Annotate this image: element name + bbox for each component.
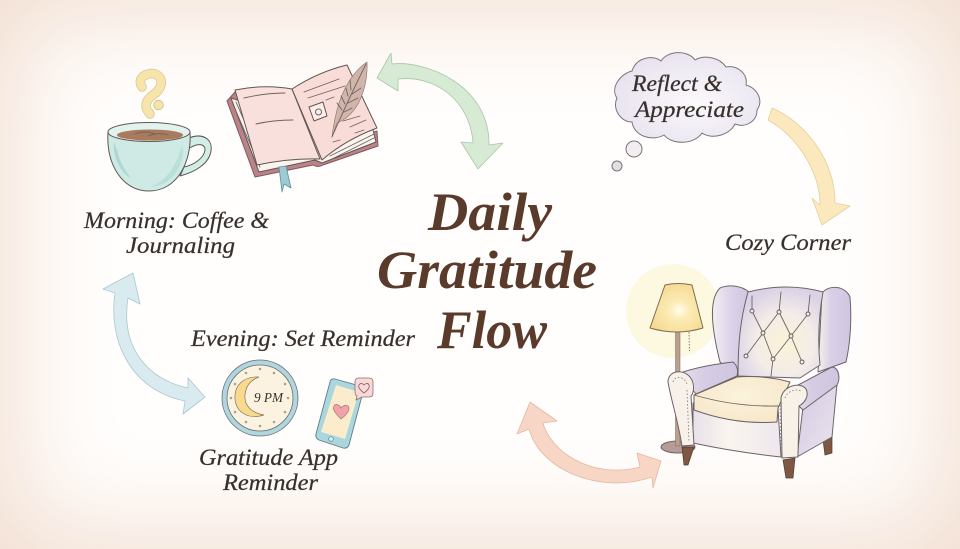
- cloud text: [631, 71, 744, 123]
- seat cushion: [694, 377, 790, 422]
- bookmark ribbon: [279, 166, 291, 192]
- crescent moon: [235, 377, 264, 417]
- label: gratitude app reminder: Reminder: [222, 470, 319, 496]
- left arm front: [668, 372, 694, 446]
- lamp shade: [650, 284, 703, 332]
- cloud text: Appreciate: [633, 97, 744, 123]
- arrow: yellow to cozy corner: [768, 108, 850, 225]
- label: morning: Morning: Coffee &: [83, 208, 270, 234]
- right arm top: [785, 367, 839, 410]
- cloud text: Reflect &: [631, 71, 723, 97]
- lamp glow: [626, 264, 720, 358]
- arrow: peach chair to center: [517, 402, 661, 488]
- icon: phone with heart: [316, 378, 373, 448]
- label: morning: Journaling: [126, 233, 235, 259]
- right wing: [818, 287, 851, 372]
- icon: floor lamp: [626, 264, 720, 453]
- feather: [332, 62, 367, 137]
- tufting: [744, 292, 810, 376]
- left wing: [712, 286, 749, 378]
- steam swirl: [140, 74, 163, 114]
- label: evening: Evening: Set Reminder: [190, 326, 416, 352]
- title: Gratitude: [377, 240, 597, 300]
- label: morning: [83, 208, 270, 259]
- right page: [292, 65, 377, 160]
- heart on screen: [333, 405, 349, 419]
- title: Daily: [427, 182, 553, 242]
- arrow: blue morning to evening: [103, 273, 205, 414]
- clock tick dots: [230, 368, 289, 427]
- clock time text: 9 PM: [254, 390, 284, 405]
- arrow: green journal to center: [377, 53, 503, 169]
- speech bubble with heart: [355, 378, 373, 400]
- cloud: [615, 53, 760, 142]
- title: [377, 182, 597, 360]
- journal cover: [227, 92, 378, 177]
- icon: armchair: [668, 286, 851, 478]
- right arm front: [781, 385, 807, 458]
- left page: [235, 87, 320, 165]
- thought bubbles: [612, 141, 642, 171]
- icon: clock with moon: [222, 360, 298, 436]
- left arm top: [670, 362, 738, 394]
- label: cozy corner: Cozy Corner: [725, 230, 852, 256]
- photo stamp: [309, 102, 327, 121]
- page block: [231, 98, 376, 172]
- icon: coffee cup with steam: [108, 74, 211, 191]
- title: Flow: [436, 300, 548, 360]
- legs: [682, 435, 832, 478]
- label: gratitude app reminder: Gratitude App: [199, 445, 338, 471]
- thought cloud: reflect and appreciate: [612, 53, 760, 171]
- front rail: [693, 403, 781, 457]
- icon: open journal with feather: [227, 62, 378, 192]
- lamp pole and base: [661, 328, 695, 453]
- chair back: [738, 287, 823, 378]
- label: gratitude app reminder: [199, 445, 338, 496]
- right side panel: [797, 384, 837, 457]
